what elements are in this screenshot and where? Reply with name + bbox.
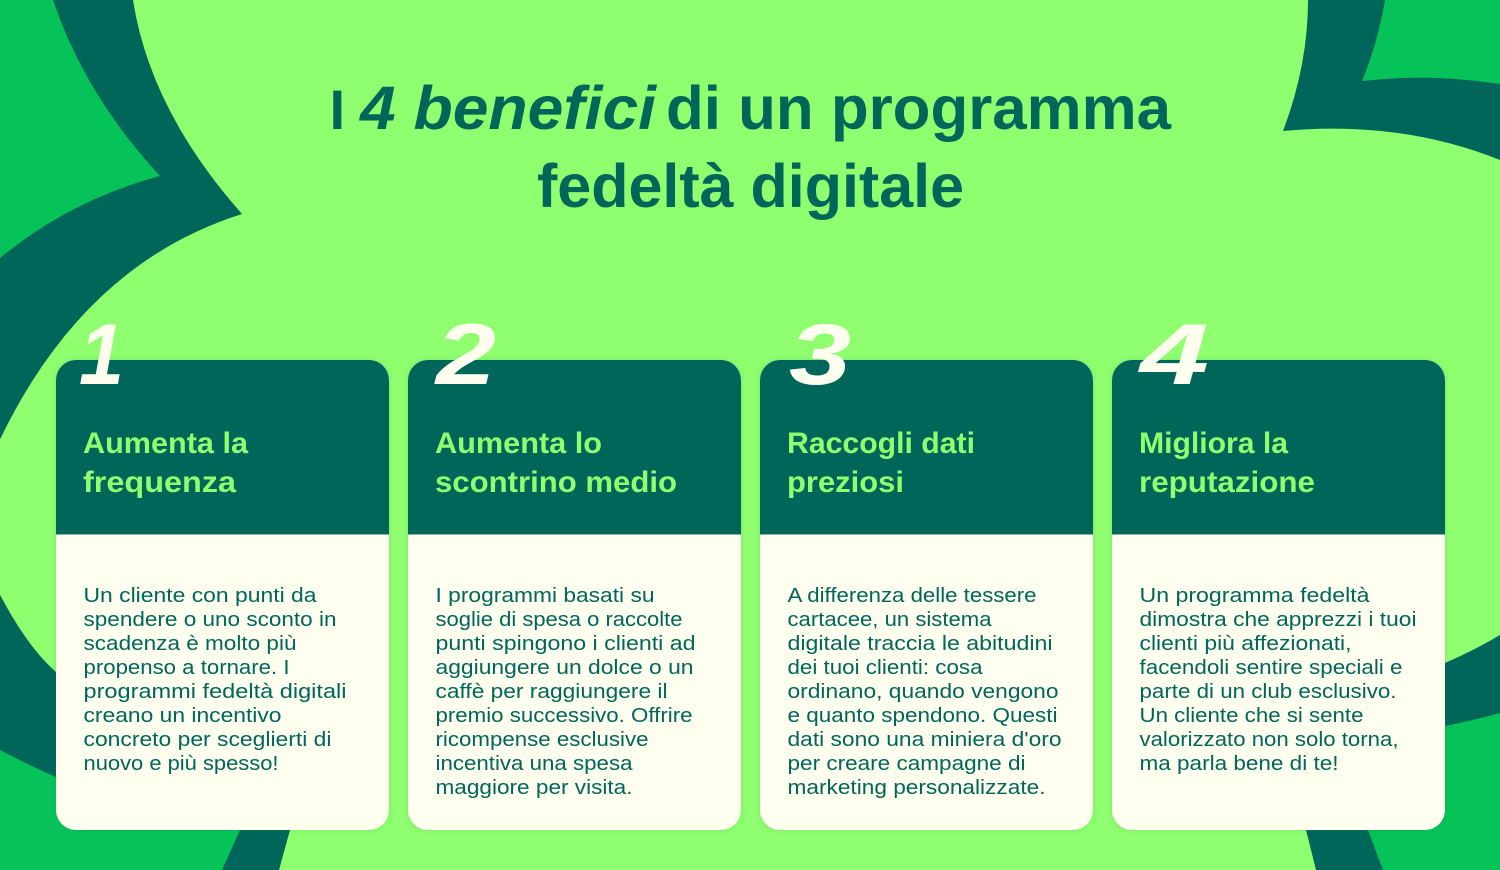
card 1 body text: programmi fedeltà digitali <box>84 681 346 703</box>
card 3 heading: preziosi <box>787 466 904 499</box>
card 1 body text: scadenza è molto più <box>84 633 296 655</box>
card 4 body text: Un cliente che si sente <box>1140 705 1364 727</box>
card 3 body text: marketing personalizzate. <box>788 777 1046 799</box>
card 1 heading <box>83 427 249 499</box>
card 2 body text <box>436 585 696 799</box>
number 4: 4 <box>1137 307 1209 403</box>
card 3 background <box>760 360 1093 830</box>
card 3 heading <box>787 427 975 499</box>
card 4 body text: dimostra che apprezzi i tuoi <box>1140 609 1416 631</box>
card 3 <box>760 307 1093 830</box>
card 2 body text: punti spingono i clienti ad <box>436 633 696 655</box>
card 2 background <box>408 360 741 830</box>
card 4 body text <box>1140 585 1416 775</box>
number 2: 2 <box>433 307 496 403</box>
card 4 body text: clienti più affezionati, <box>1140 633 1352 655</box>
card 4 body text: parte di un club esclusivo. <box>1140 681 1396 703</box>
card 1 body text: concreto per sceglierti di <box>84 729 332 751</box>
title: 4 benefici <box>358 74 657 142</box>
card 3 body text: per creare campagne di <box>788 753 1026 775</box>
card 1 heading: Aumenta la <box>83 427 249 460</box>
card 1 body text: Un cliente con punti da <box>84 585 318 607</box>
card 3 body text: digitale traccia le abitudini <box>788 633 1052 655</box>
card 2 body text: soglie di spesa o raccolte <box>436 609 682 631</box>
card 4 <box>1112 307 1445 830</box>
card 4 background <box>1112 360 1445 830</box>
card 2 heading <box>435 427 677 499</box>
card 1 heading: frequenza <box>83 466 237 499</box>
card 4 heading <box>1139 427 1315 499</box>
card 3 body text: ordinano, quando vengono <box>788 681 1058 703</box>
card 2 body text: ricompense esclusive <box>436 729 648 751</box>
card 1 body text: creano un incentivo <box>84 705 282 727</box>
card 4 heading: reputazione <box>1139 466 1315 499</box>
card 4 body text: Un programma fedeltà <box>1140 585 1371 607</box>
card 1 background <box>56 360 389 830</box>
card 3 body text: cartacee, un sistema <box>788 609 992 631</box>
title: I <box>330 78 345 141</box>
card 2 heading: Aumenta lo <box>435 427 602 460</box>
card 3 header <box>760 360 1093 534</box>
number 1: 1 <box>79 307 124 403</box>
card 2 body text: maggiore per visita. <box>436 777 632 799</box>
card 1 body text: nuovo e più spesso! <box>84 753 278 775</box>
card 1 header <box>56 360 389 534</box>
card 2 body text: premio successivo. Offrire <box>436 705 692 727</box>
card 4 body text: valorizzato non solo torna, <box>1140 729 1398 751</box>
card 2 <box>408 307 741 830</box>
title: di un programma <box>666 74 1172 142</box>
card 3 heading: Raccogli dati <box>787 427 975 460</box>
card 3 body text: A differenza delle tessere <box>788 585 1036 607</box>
card 1 body text: spendere o uno sconto in <box>84 609 336 631</box>
card 2 body text: incentiva una spesa <box>436 753 633 775</box>
card 2 heading: scontrino medio <box>435 466 677 499</box>
card 2 body text: aggiungere un dolce o un <box>436 657 694 679</box>
card 2 body text: caffè per raggiungere il <box>436 681 668 703</box>
card 4 header <box>1112 360 1445 534</box>
card 1 <box>56 307 389 830</box>
card 4 body text: facendoli sentire speciali e <box>1140 657 1402 679</box>
card 4 body text: ma parla bene di te! <box>1140 753 1338 775</box>
title: fedeltà digitale <box>537 152 964 220</box>
card 3 body text: dei tuoi clienti: cosa <box>788 657 983 679</box>
card 2 header <box>408 360 741 534</box>
card 4 heading: Migliora la <box>1139 427 1289 460</box>
card 3 body text: dati sono una miniera d'oro <box>788 729 1062 751</box>
card 2 body text: I programmi basati su <box>436 585 654 607</box>
card 3 body text <box>788 585 1062 799</box>
card 1 body text: propenso a tornare. I <box>84 657 290 679</box>
number 3: 3 <box>789 307 851 403</box>
title <box>330 74 1172 220</box>
card 3 body text: e quanto spendono. Questi <box>788 705 1058 727</box>
card 1 body text <box>84 585 346 775</box>
